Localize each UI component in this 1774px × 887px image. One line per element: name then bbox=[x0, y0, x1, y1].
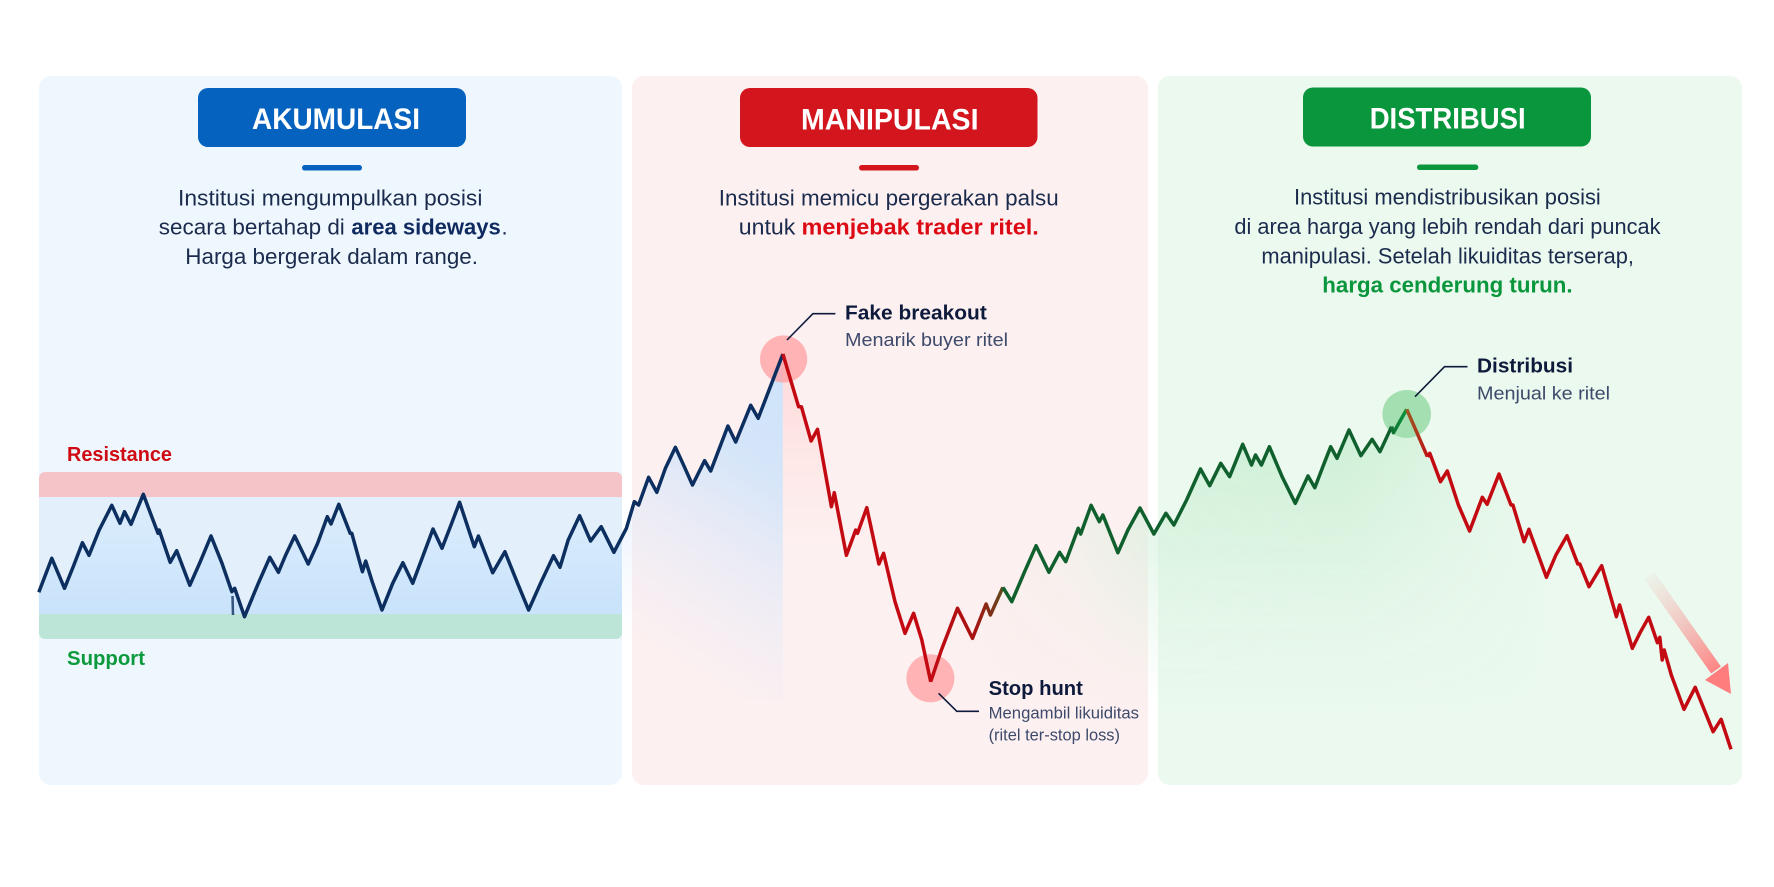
badge: distribusi: DISTRIBUSI bbox=[1370, 102, 1526, 136]
description: distribusi bbox=[1234, 185, 1661, 298]
marker: stop hunt bbox=[906, 654, 954, 702]
callout: fake breakout: Fake breakout bbox=[845, 302, 987, 324]
badge: manipulasi bbox=[740, 88, 1038, 147]
label: resistance: Resistance bbox=[67, 444, 172, 466]
line: accumulation and rise bbox=[39, 354, 783, 617]
line: artefact tick near support bbox=[231, 596, 234, 615]
line: distribution start bbox=[1407, 409, 1427, 457]
callout: distribusi: Distribusi bbox=[1477, 356, 1573, 378]
range band: sideways area bbox=[39, 497, 622, 614]
marker: fake breakout bbox=[760, 335, 807, 383]
description: distribusi: manipulasi. Setelah likuiditas terserap, bbox=[1261, 243, 1634, 268]
callout: stop hunt bbox=[939, 678, 1139, 744]
area fill: manipulation drop bbox=[783, 354, 931, 700]
line: green rise bbox=[1003, 427, 1392, 602]
callout: fake breakout bbox=[787, 302, 1008, 350]
line: distribution drop bbox=[1427, 453, 1731, 749]
area fill: distribution rise bbox=[1072, 432, 1462, 652]
callout: distribusi bbox=[1415, 356, 1610, 403]
description: akumulasi: secara bertahap di bbox=[159, 215, 345, 240]
description: akumulasi: area sideways bbox=[351, 215, 501, 240]
description: akumulasi: Institusi mengumpulkan posisi bbox=[178, 185, 482, 210]
marker: distribusi bbox=[1382, 390, 1431, 438]
panel: manipulasi bbox=[632, 76, 1148, 785]
description: manipulasi bbox=[719, 185, 1059, 240]
callout: stop hunt: Mengambil likuiditas bbox=[989, 703, 1139, 722]
resistance band bbox=[39, 472, 622, 497]
badge: akumulasi: AKUMULASI bbox=[252, 103, 420, 136]
callout: distribusi: Menjual ke ritel bbox=[1477, 383, 1610, 403]
description: akumulasi: . bbox=[502, 215, 508, 240]
description: manipulasi: untuk bbox=[739, 215, 796, 240]
description: akumulasi: Harga bergerak dalam range. bbox=[185, 244, 478, 269]
panel: akumulasi bbox=[39, 76, 622, 785]
description: distribusi: Institusi mendistribusikan posisi bbox=[1294, 185, 1601, 210]
divider: akumulasi bbox=[302, 165, 362, 170]
badge: manipulasi: MANIPULASI bbox=[801, 103, 978, 136]
line: manipulation drop bbox=[783, 354, 931, 682]
description: distribusi: harga cenderung turun. bbox=[1322, 273, 1573, 298]
price line chart bbox=[39, 354, 1731, 749]
badge: akumulasi bbox=[198, 88, 466, 147]
panel: distribusi bbox=[1158, 76, 1742, 785]
badge: distribusi bbox=[1303, 88, 1591, 146]
description: akumulasi bbox=[159, 185, 508, 269]
arrow: downward trend bbox=[1649, 575, 1731, 694]
callout: fake breakout: Menarik buyer ritel bbox=[845, 330, 1008, 350]
description: manipulasi: menjebak trader ritel. bbox=[802, 215, 1039, 240]
divider: manipulasi bbox=[859, 165, 919, 170]
callout: stop hunt: (ritel ter-stop loss) bbox=[989, 726, 1120, 744]
area fill: breakout rise bbox=[622, 354, 783, 700]
divider: distribusi bbox=[1417, 164, 1478, 170]
line: recovery transition bbox=[931, 587, 1003, 682]
support band bbox=[39, 614, 622, 639]
label: support: Support bbox=[67, 648, 145, 670]
line: green peak bbox=[1392, 409, 1407, 433]
description: distribusi: di area harga yang lebih rendah dari puncak bbox=[1234, 214, 1661, 239]
area fill: sideways bbox=[39, 494, 622, 617]
description: manipulasi: Institusi memicu pergerakan palsu bbox=[719, 185, 1059, 210]
callout: stop hunt: Stop hunt bbox=[989, 678, 1083, 700]
